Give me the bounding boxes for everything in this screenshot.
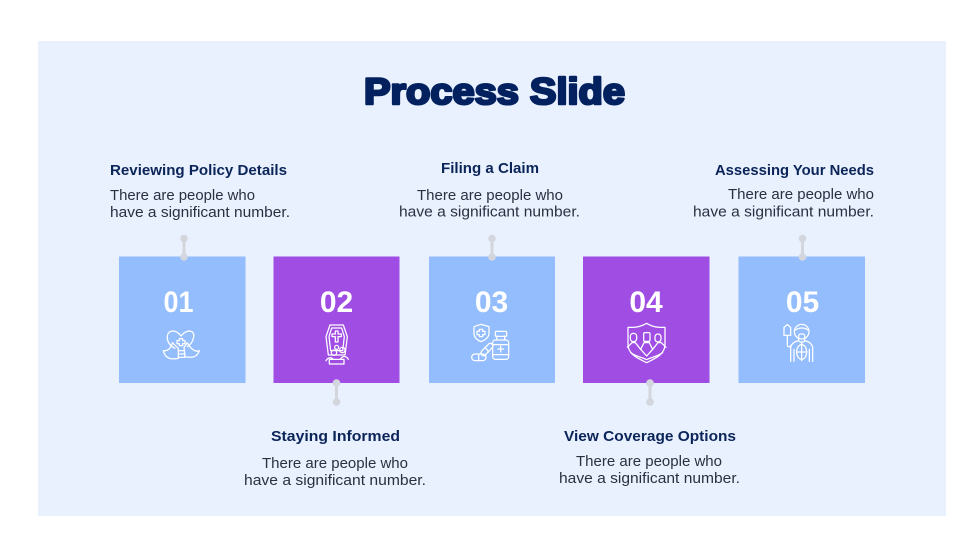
step 2: Staying Informed	[244, 256, 426, 489]
step 2 connector	[333, 379, 340, 406]
title: Process Slide	[364, 71, 625, 112]
step 1 number: 01	[164, 286, 194, 319]
step 2 description	[244, 456, 426, 489]
step 3 number: 03	[475, 286, 508, 319]
step 4 connector	[646, 379, 654, 406]
step 1 description: have a significant number.	[110, 205, 290, 221]
step 4 description: There are people who	[576, 454, 722, 470]
step 5 number: 05	[786, 286, 819, 319]
step 5 box	[738, 256, 865, 383]
step 2 description: have a significant number.	[244, 473, 426, 489]
step 2 number: 02	[320, 286, 353, 319]
step 1 description	[110, 188, 290, 221]
icon: shield and medicine	[472, 324, 509, 361]
step 1 connector	[180, 235, 188, 261]
step 5 description: have a significant number.	[693, 204, 874, 220]
icon: family shield	[627, 323, 666, 363]
step 4: View Coverage Options	[559, 256, 740, 487]
step 5 heading: Assessing Your Needs	[715, 162, 874, 179]
step 4 number: 04	[629, 286, 663, 319]
step 1 box	[119, 256, 246, 383]
step 2 heading: Staying Informed	[271, 428, 400, 445]
step 4 heading: View Coverage Options	[564, 428, 736, 445]
step 1 description: There are people who	[110, 188, 255, 204]
step 1 heading: Reviewing Policy Details	[110, 162, 287, 179]
step 3 description	[399, 188, 580, 220]
background panel	[38, 41, 946, 516]
step 4 box	[583, 256, 710, 383]
step 3 box	[429, 256, 555, 383]
step 3 heading: Filing a Claim	[441, 160, 539, 177]
icon: heart with hands	[163, 331, 199, 359]
step 4 description: have a significant number.	[559, 471, 740, 487]
step 2 box	[274, 256, 400, 383]
step 3: Filing a Claim	[399, 160, 580, 383]
step 3 description: have a significant number.	[399, 204, 580, 220]
step 5: Assessing Your Needs	[693, 162, 874, 383]
step 4 description	[559, 454, 740, 487]
step 5 connector	[799, 235, 806, 261]
step 1: Reviewing Policy Details	[110, 162, 290, 383]
step 5 description	[693, 187, 874, 220]
icon: coffin with flowers	[326, 325, 348, 364]
icon: patient with oxygen mask	[784, 324, 813, 361]
step 2 description: There are people who	[262, 456, 408, 472]
step 3 description: There are people who	[417, 188, 563, 204]
step 5 description: There are people who	[728, 187, 874, 203]
step 3 connector	[488, 235, 496, 261]
